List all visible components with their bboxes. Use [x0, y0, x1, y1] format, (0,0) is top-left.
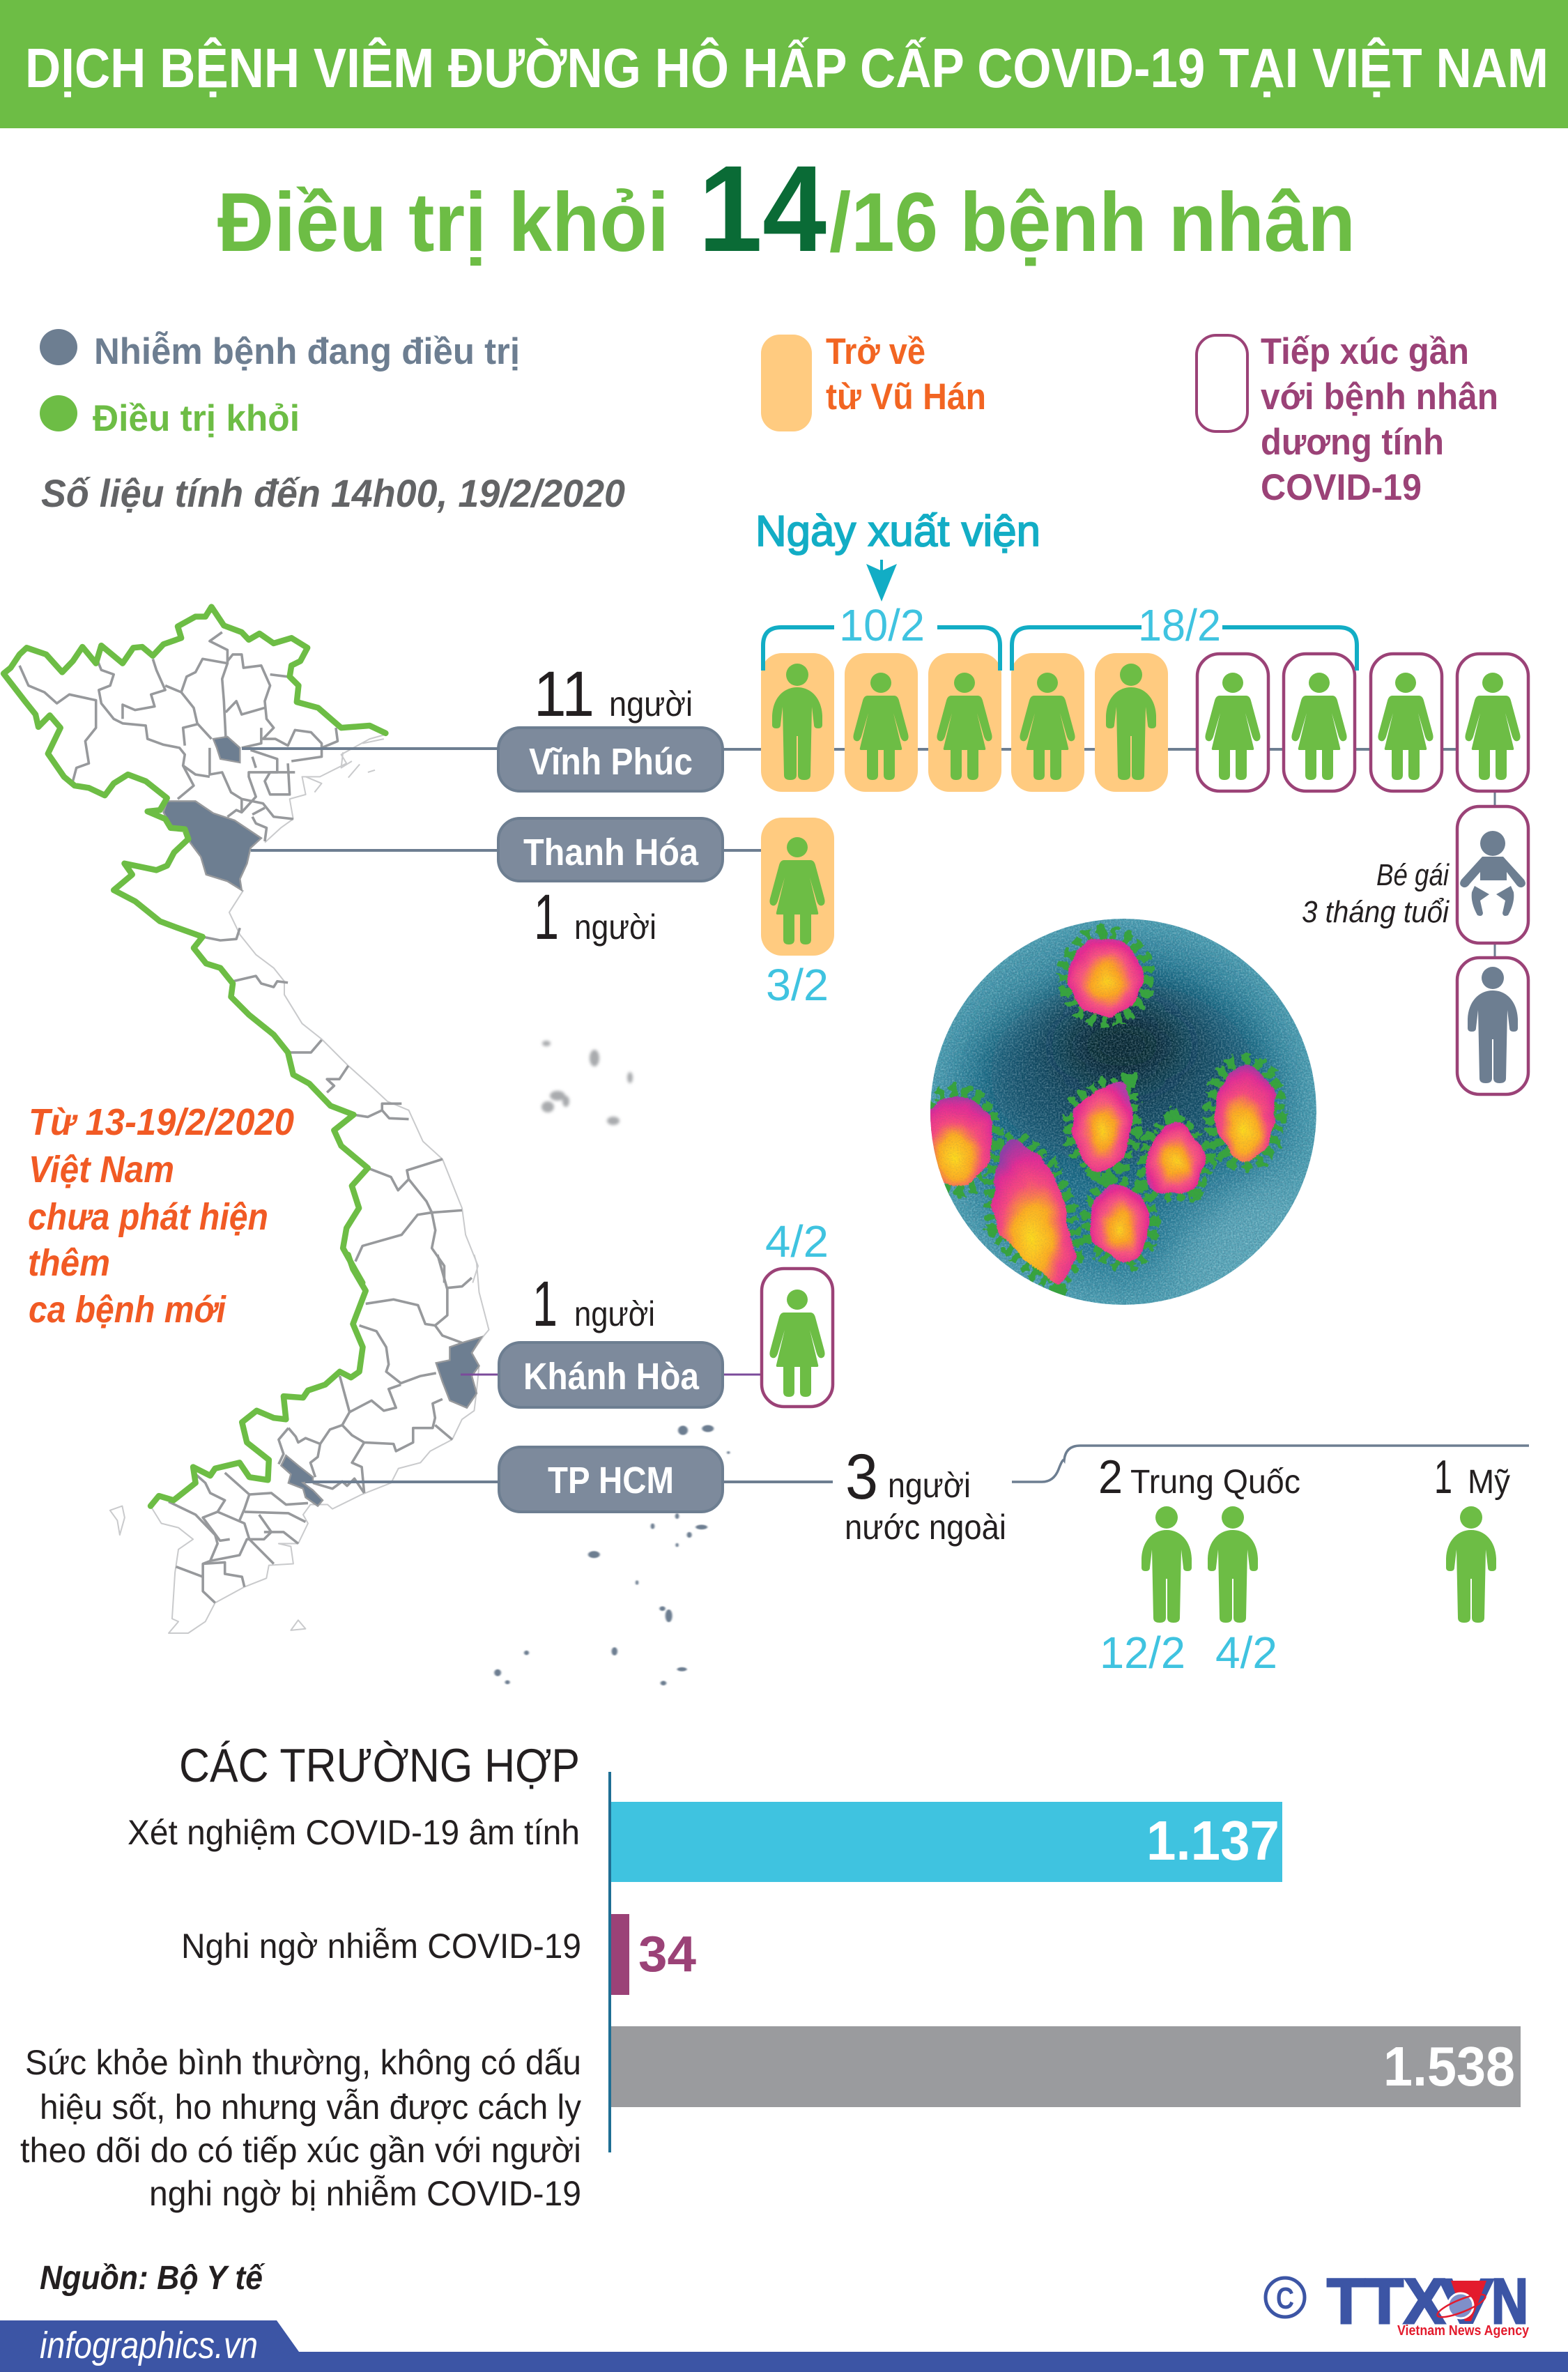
discharge date 4/2: 4/2: [765, 1216, 829, 1267]
legend: returned from Wuhan: Trở về: [826, 331, 925, 372]
baby note: [1302, 858, 1450, 929]
Vinh Phuc row: [498, 600, 1528, 792]
note: no new cases: [28, 1101, 294, 1331]
brackets and discharge dates: [763, 600, 1357, 671]
baby note: 3 tháng tuổi: [1302, 895, 1450, 929]
row: quarantined: 1.538: [1383, 2035, 1515, 2097]
brackets and discharge dates: 10/2: [839, 600, 925, 650]
legend: status: [40, 329, 520, 439]
label: Khanh Hoa: [499, 1342, 723, 1407]
virus image: [920, 918, 1324, 1319]
legend: status: Điều trị khỏi: [93, 398, 300, 439]
copyright logo: [1266, 2278, 1305, 2317]
footer bar: [0, 2320, 1568, 2372]
label: Thanh Hoa: [498, 818, 723, 881]
China group: [1098, 1451, 1300, 1678]
footer bar: infographics.vn: [40, 2325, 258, 2366]
baby card: [1457, 806, 1528, 943]
legend: status: Nhiễm bệnh đang điều trị: [94, 330, 520, 372]
row: quarantined: hiệu sốt, ho nhưng vẫn được cách ly: [40, 2088, 581, 2127]
connector lines: [242, 749, 1529, 1482]
USA group: [1434, 1451, 1510, 1623]
count: 3 foreigners: [845, 1441, 1006, 1547]
Paracel islands: [541, 1041, 633, 1125]
subtitle: [217, 141, 1355, 277]
row: negative tests: 1.137: [1146, 1809, 1279, 1872]
Khanh Hoa province: [436, 1337, 482, 1408]
count: 3 foreigners: người: [888, 1466, 971, 1505]
arrow: [866, 560, 897, 602]
note: no new cases: thêm: [28, 1242, 110, 1284]
China group: 4/2: [1215, 1628, 1277, 1678]
note: no new cases: Việt Nam: [29, 1149, 174, 1191]
China group: Trung Quốc: [1130, 1464, 1300, 1501]
axis: [608, 1772, 611, 2152]
row: quarantined: nghi ngờ bị nhiễm COVID-19: [149, 2174, 581, 2213]
count: 3 foreigners: 3: [845, 1441, 878, 1513]
count: 1 person: 1: [534, 882, 559, 953]
label: TP HCM: [499, 1447, 723, 1512]
bar chart: cases: [20, 1739, 1521, 2213]
row: quarantined: theo dõi do có tiếp xúc gần với người: [20, 2131, 581, 2170]
row: negative tests: [128, 1802, 1282, 1882]
count: 11 people: [534, 659, 693, 730]
data date note: Số liệu tính đến 14h00, 19/2/2020: [41, 471, 625, 515]
Khanh Hoa row: [499, 1216, 833, 1407]
subtitle: 14: [698, 141, 827, 277]
map of Vietnam: [3, 607, 730, 1685]
row: suspected: [181, 1914, 696, 1995]
legend: close contact: COVID-19: [1261, 467, 1422, 508]
Thanh Hoa row: [498, 818, 834, 1010]
discharge date heading: Ngày xuất viện: [755, 507, 1040, 556]
copyright logo: C: [1276, 2281, 1294, 2316]
count: 1 person: 1: [532, 1269, 558, 1340]
note: no new cases: ca bệnh mới: [29, 1289, 226, 1331]
map south: [110, 1255, 730, 1685]
count: 1 person: người: [574, 1294, 655, 1333]
count: 1 person: người: [574, 908, 656, 947]
Ho Chi Minh City row: [499, 1441, 1510, 1678]
label: Vinh Phuc: [498, 728, 723, 791]
baby note: Bé gái: [1376, 858, 1450, 892]
note: no new cases: chưa phát hiện: [28, 1196, 268, 1238]
background grain: [930, 918, 1317, 1306]
TTXVN logo: Vietnam News Agency: [1397, 2323, 1530, 2339]
legend: close contact: [1197, 331, 1498, 508]
label: Thanh Hoa: Thanh Hóa: [523, 832, 699, 873]
grey male card: [1457, 958, 1528, 1094]
label: Khanh Hoa: Khánh Hòa: [523, 1356, 700, 1398]
USA group: 1: [1434, 1451, 1452, 1503]
row: suspected: 34: [638, 1927, 696, 1982]
Spratly islands: [494, 1425, 730, 1685]
legend: close contact: với bệnh nhân: [1261, 376, 1498, 418]
note: no new cases: Từ 13-19/2/2020: [29, 1101, 294, 1143]
count: 11 people: 11: [534, 659, 594, 730]
virus grain: [930, 918, 1317, 1306]
discharge date 3/2: 3/2: [766, 960, 829, 1010]
virus bodies: [921, 937, 1275, 1285]
subtitle: /16 bệnh nhân: [829, 176, 1355, 269]
label: TP HCM: TP HCM: [548, 1460, 674, 1501]
row: quarantined: [20, 2026, 1521, 2213]
TTXVN logo: TTX: [1327, 2266, 1445, 2337]
row: suspected: Nghi ngờ nhiễm COVID-19: [181, 1927, 581, 1966]
count: 11 people: người: [609, 684, 693, 724]
border south: [151, 1255, 366, 1506]
legend: returned from Wuhan: từ Vũ Hán: [826, 376, 986, 418]
TTXVN logo: N: [1491, 2266, 1528, 2337]
border north: [3, 607, 385, 1283]
source: Nguồn: Bộ Y tế: [40, 2260, 266, 2297]
patient cards returned from Wuhan: [761, 653, 1168, 792]
subtitle: Điều trị khỏi: [217, 176, 669, 269]
patient card: [761, 818, 834, 956]
Vinh Phuc province: [213, 737, 240, 763]
header banner: [0, 0, 1568, 128]
count: 1 person: [532, 1269, 655, 1340]
count: 1 person: [534, 882, 656, 953]
Ho Chi Minh City: [281, 1455, 323, 1506]
map north: [3, 607, 478, 1283]
Thanh Hoa province: [164, 801, 261, 890]
legend: close contact: dương tính: [1261, 422, 1444, 463]
TTXVN logo: [1327, 2266, 1530, 2339]
count: 3 foreigners: nước ngoài: [845, 1508, 1006, 1547]
chart heading: CÁC TRƯỜNG HỢP: [179, 1739, 580, 1792]
China group: 12/2: [1100, 1628, 1185, 1678]
virus spikes: [920, 936, 1276, 1285]
patient card: [762, 1269, 833, 1407]
label: Vinh Phuc: Vĩnh Phúc: [529, 741, 693, 783]
USA group: Mỹ: [1468, 1464, 1510, 1501]
brackets and discharge dates: 18/2: [1138, 600, 1221, 650]
patient cards close contacts: [1197, 654, 1528, 791]
row: negative tests: Xét nghiệm COVID-19 âm tính: [128, 1813, 580, 1852]
legend: returned from Wuhan: [761, 331, 986, 431]
China group: 2: [1098, 1451, 1123, 1503]
legend: close contact: Tiếp xúc gần: [1261, 331, 1469, 372]
TTXVN logo: V: [1438, 2266, 1494, 2337]
row: quarantined: Sức khỏe bình thường, không có dấu: [25, 2043, 581, 2082]
